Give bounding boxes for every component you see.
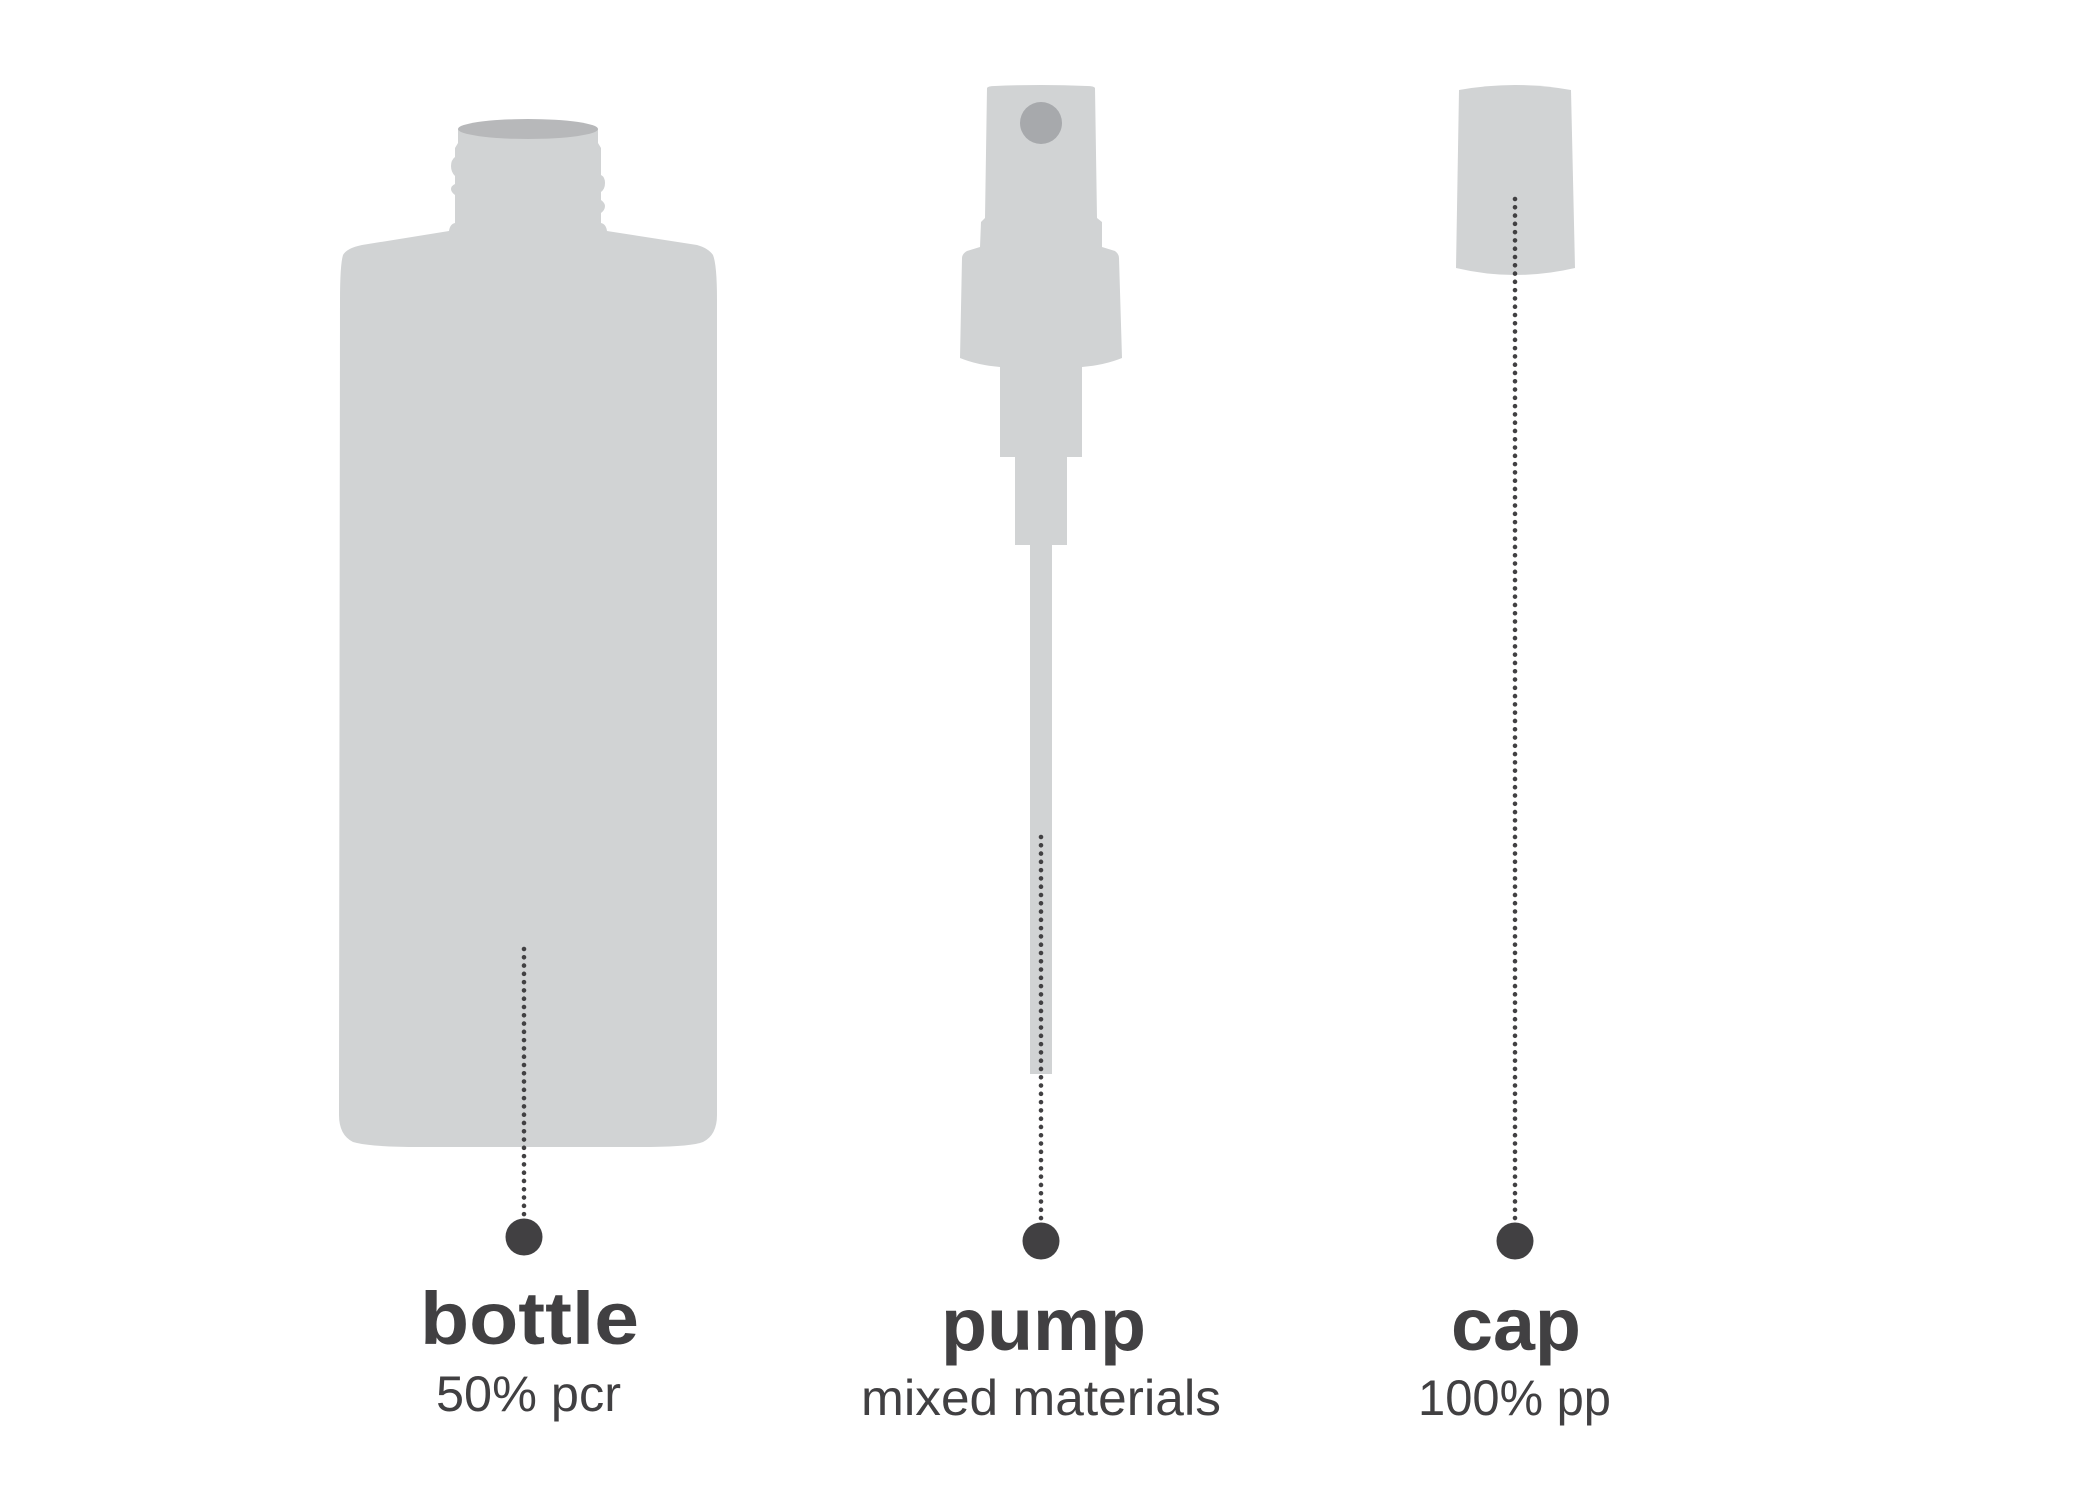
pump material: mixed materials	[861, 1370, 1221, 1426]
cap heading: cap	[1451, 1283, 1581, 1366]
pump heading: pump	[941, 1283, 1146, 1366]
panel: bottle	[339, 119, 717, 1422]
cap leader line	[1513, 199, 1517, 1219]
panel: pump	[861, 85, 1221, 1426]
cap silhouette	[1456, 85, 1575, 275]
panel: cap	[1418, 85, 1611, 1426]
pump nozzle	[1020, 102, 1062, 144]
pump silhouette	[960, 85, 1122, 1074]
bottle leader line	[522, 949, 526, 1215]
bottle opening	[458, 119, 598, 139]
pump leader line	[1039, 837, 1043, 1219]
bottle heading: bottle	[420, 1277, 639, 1360]
cap marker dot	[1496, 1222, 1534, 1260]
bottle material: 50% pcr	[436, 1366, 621, 1422]
bottle silhouette	[339, 129, 717, 1147]
bottle marker dot	[506, 1218, 542, 1256]
pump marker dot	[1022, 1222, 1060, 1260]
cap material: 100% pp	[1418, 1370, 1611, 1426]
